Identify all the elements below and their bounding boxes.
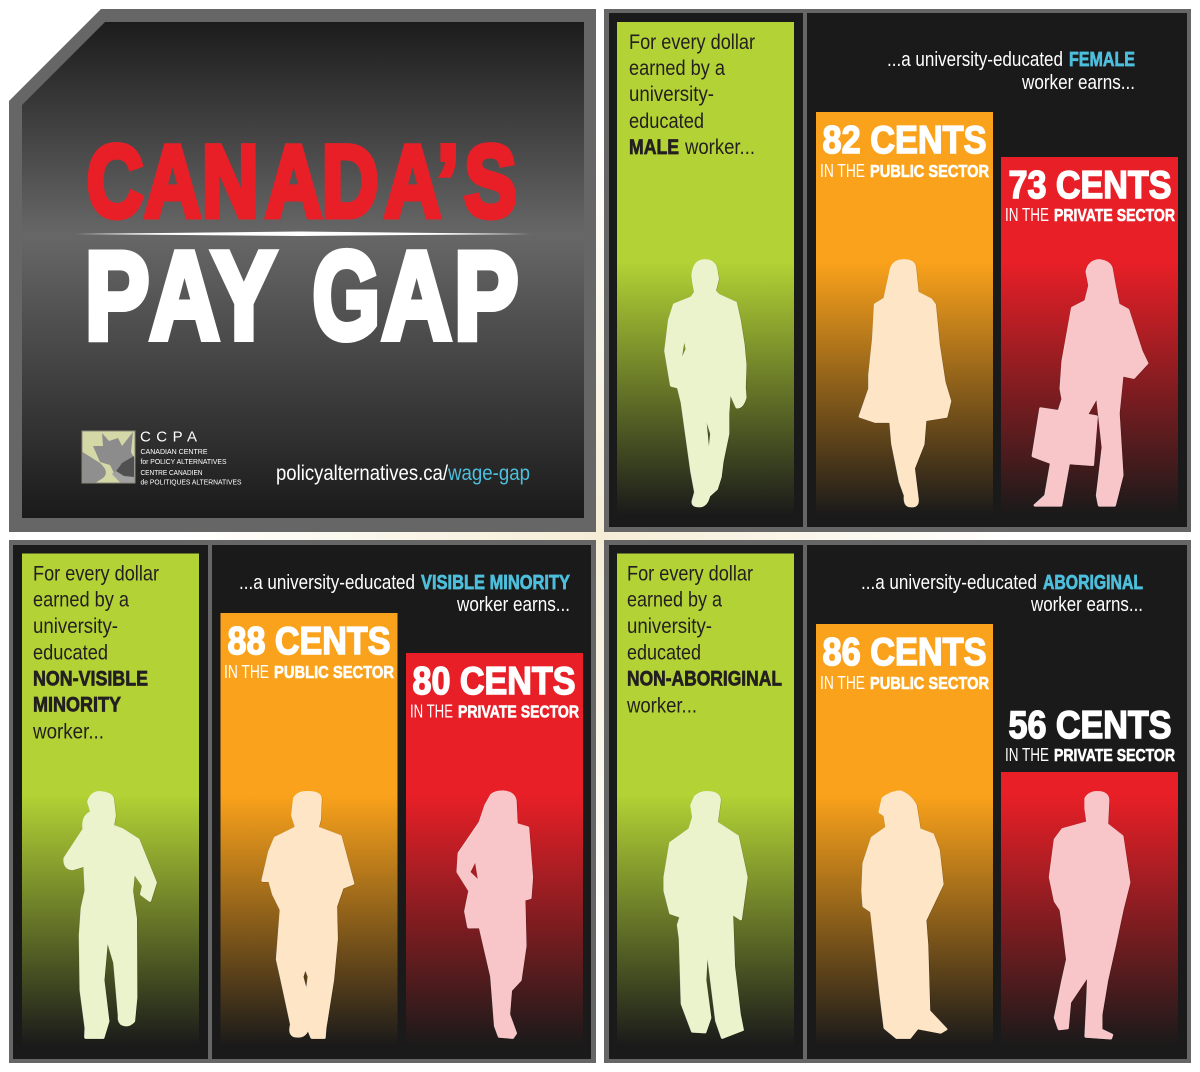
orange bar: public sector 88 cents [220, 613, 398, 1046]
non-visible minority text: For every dollar [33, 562, 159, 586]
green bar: male worker [617, 22, 794, 515]
male worker text: For every dollar [629, 30, 755, 54]
label: 73 cents private: IN THE [1005, 205, 1049, 225]
non-visible minority text: educated [33, 640, 108, 664]
male worker text [629, 30, 755, 159]
silhouette: man from behind [665, 793, 747, 1038]
label: 82 cents public: 82 CENTS [822, 119, 986, 162]
non-visible minority text: MINORITY [33, 694, 121, 716]
label: 56 cents private: 56 CENTS [1008, 704, 1172, 747]
label: 82 cents public: PUBLIC SECTOR [870, 161, 989, 181]
female worker heading [887, 48, 1135, 94]
panel: aboriginal comparison [604, 540, 1191, 1063]
visible minority heading [239, 571, 571, 616]
non-visible minority text: NON-VISIBLE [33, 668, 148, 690]
label: 80 cents private: IN THE [410, 702, 453, 722]
title rule [75, 232, 531, 236]
female worker heading: ...a university-educated [887, 48, 1063, 71]
female worker heading: FEMALE [1069, 49, 1135, 71]
red bar: private sector 56 cents [1001, 772, 1178, 1046]
aboriginal heading: ABORIGINAL [1043, 572, 1143, 594]
visible minority heading: VISIBLE MINORITY [421, 572, 571, 594]
title: Pay Gap: PAY [85, 226, 276, 365]
red bar: private sector 73 cents [1001, 157, 1178, 515]
non-aboriginal text: earned by a [627, 588, 722, 612]
label: 80 cents private: PRIVATE SECTOR [458, 702, 579, 722]
red bar: private sector 80 cents [406, 653, 583, 1046]
title: Canada's: CANADA’S [87, 126, 517, 239]
label: 82 cents public [820, 119, 989, 181]
visible minority heading: worker earns... [456, 593, 570, 616]
label: 86 cents public [820, 631, 989, 693]
label: 80 cents private [410, 660, 579, 722]
non-visible minority text: worker... [32, 720, 104, 744]
CCPA logo: de POLITIQUES ALTERNATIVES [140, 478, 242, 486]
label: 88 cents public: PUBLIC SECTOR [274, 662, 394, 682]
title: Pay Gap: G [313, 226, 380, 365]
non-visible minority text: earned by a [33, 588, 129, 612]
male worker text: earned by a [629, 56, 725, 80]
orange bar: public sector 86 cents [816, 624, 993, 1046]
aboriginal heading [861, 571, 1143, 616]
silhouette: man on phone [65, 793, 156, 1038]
non-aboriginal text: university- [627, 614, 712, 638]
title: Pay Gap [85, 226, 518, 365]
label: 88 cents public: IN THE [224, 662, 269, 682]
male worker text: educated [629, 109, 704, 133]
label: 86 cents public: 86 CENTS [822, 631, 986, 674]
label: 86 cents public: IN THE [820, 673, 865, 693]
non-visible minority text: university- [33, 614, 118, 638]
website URL: policyalternatives.ca/ [276, 462, 448, 485]
label: 73 cents private: 73 CENTS [1008, 164, 1172, 207]
female worker heading: worker earns... [1021, 71, 1135, 94]
silhouette: woman hand on hip [458, 792, 532, 1038]
green bar: non-aboriginal worker [617, 554, 794, 1046]
green bar: non-visible minority worker [22, 554, 199, 1046]
label: 82 cents public: IN THE [820, 161, 865, 181]
CCPA logo: CANADIAN CENTRE [140, 447, 208, 456]
silhouette: woman with bag [1033, 261, 1147, 506]
non-aboriginal text [626, 562, 782, 718]
label: 88 cents public [224, 620, 394, 682]
CCPA logo: for POLICY ALTERNATIVES [140, 457, 226, 466]
aboriginal heading: worker earns... [1030, 593, 1143, 616]
panel: title [9, 9, 596, 532]
non-aboriginal text: educated [627, 640, 701, 664]
label: 56 cents private: IN THE [1005, 745, 1049, 765]
silhouette: walking man [666, 261, 745, 506]
label: 88 cents public: 88 CENTS [228, 620, 390, 663]
male worker text: worker... [684, 135, 755, 159]
non-aboriginal text: For every dollar [627, 562, 753, 586]
label: 80 cents private: 80 CENTS [412, 660, 576, 703]
panel: visible minority comparison [9, 540, 596, 1063]
silhouette: woman hands in pockets [863, 792, 946, 1038]
label: 86 cents public: PUBLIC SECTOR [870, 673, 989, 693]
website URL: wage-gap [447, 462, 530, 485]
visible minority heading: ...a university-educated [239, 571, 415, 594]
non-aboriginal text: worker... [626, 694, 697, 718]
CCPA logo: CCPA [140, 428, 197, 446]
CCPA logo: CENTRE CANADIEN [140, 468, 202, 477]
title: Pay Gap: AP [382, 226, 518, 365]
panel: female comparison [604, 9, 1191, 532]
non-visible minority text [32, 562, 159, 744]
non-aboriginal text: NON-ABORIGINAL [627, 668, 782, 690]
male worker text: university- [629, 82, 714, 106]
CCPA logo [82, 428, 242, 486]
label: 73 cents private [1005, 164, 1175, 225]
silhouette: man crossed legs [1050, 793, 1129, 1038]
label: 56 cents private [1005, 704, 1175, 765]
silhouette: man in t-shirt [263, 792, 353, 1038]
orange bar: public sector 82 cents [816, 112, 993, 515]
aboriginal heading: ...a university-educated [861, 571, 1037, 594]
male worker text: MALE [629, 136, 679, 159]
silhouette: woman in coat [860, 261, 950, 506]
